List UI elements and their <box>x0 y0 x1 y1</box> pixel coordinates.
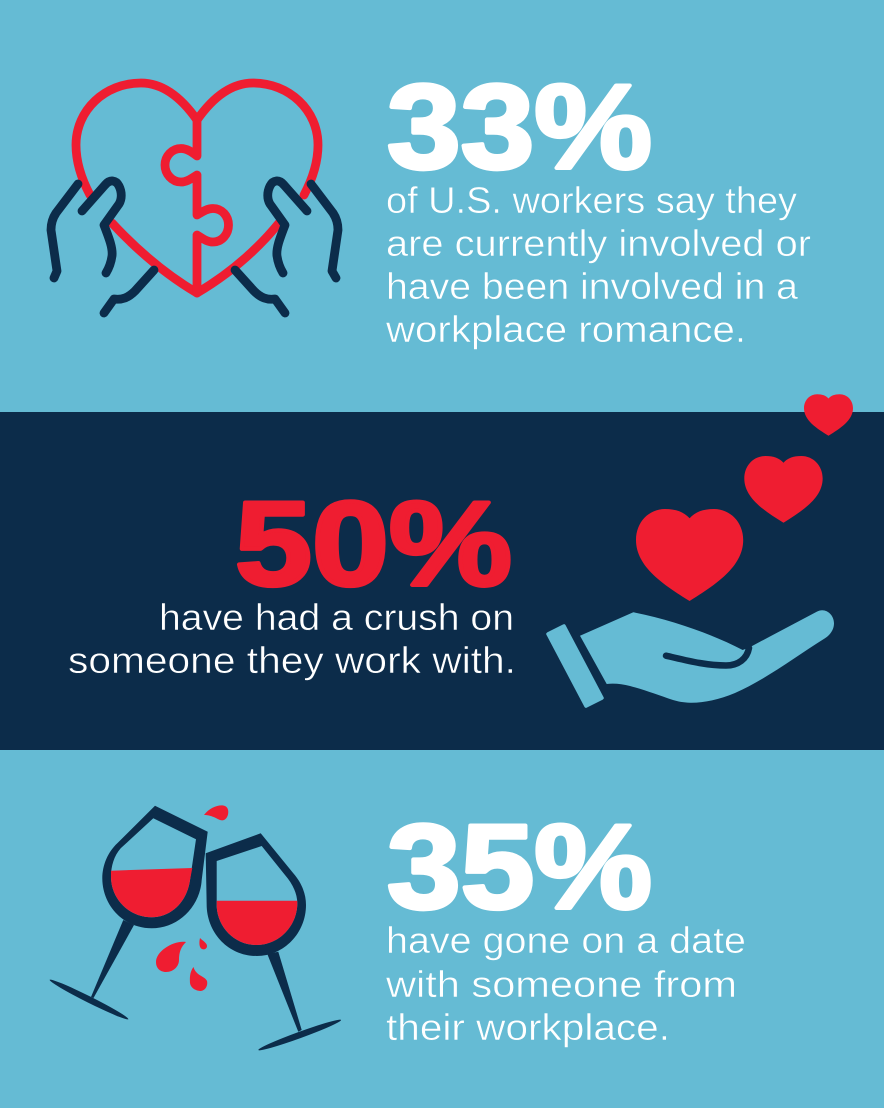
icon: clinking wine glasses with splashes <box>48 805 342 1053</box>
text block: 33% description <box>385 180 811 350</box>
text block: 33% description: of U.S. workers say they <box>386 180 798 221</box>
text block: 35% description: with someone from <box>385 964 737 1005</box>
icon part: left glass <box>48 806 208 1022</box>
heading: 33%: 33% <box>387 60 652 194</box>
heading: 35%: 35% <box>387 800 652 934</box>
icon part: large heart <box>636 509 743 601</box>
icon part: puzzle heart <box>76 83 318 293</box>
icon part: right glass <box>206 833 342 1053</box>
panel: top background <box>0 0 884 412</box>
text block: 33% description: workplace romance. <box>385 309 746 350</box>
icon part: left hand <box>51 181 154 313</box>
heading: 50%: 50% <box>235 477 512 611</box>
icon: hand releasing hearts <box>548 394 853 706</box>
text block: 33% description: are currently involved or <box>386 223 811 264</box>
text block: 35% description <box>385 920 746 1048</box>
icon part: palm crease <box>666 648 749 666</box>
icon part: small heart <box>804 394 853 436</box>
icon part: medium heart <box>744 456 823 523</box>
icon part: open hand <box>580 610 834 703</box>
text block: 35% description: have gone on a date <box>386 920 746 961</box>
text block: 50% description <box>68 597 516 681</box>
panel: bottom background <box>0 750 884 1108</box>
icon part: sleeve cuff <box>548 626 602 706</box>
text block: 50% description: have had a crush on <box>159 597 514 638</box>
icon part: wine splashes <box>156 805 228 991</box>
text block: 33% description: have been involved in a <box>386 266 798 307</box>
text block: 50% description: someone they work with. <box>68 640 516 681</box>
text block: 35% description: their workplace. <box>386 1007 670 1048</box>
panel: middle navy band <box>0 412 884 750</box>
icon part: right hand <box>235 181 338 313</box>
icon: puzzle heart held by two hands <box>51 83 338 313</box>
